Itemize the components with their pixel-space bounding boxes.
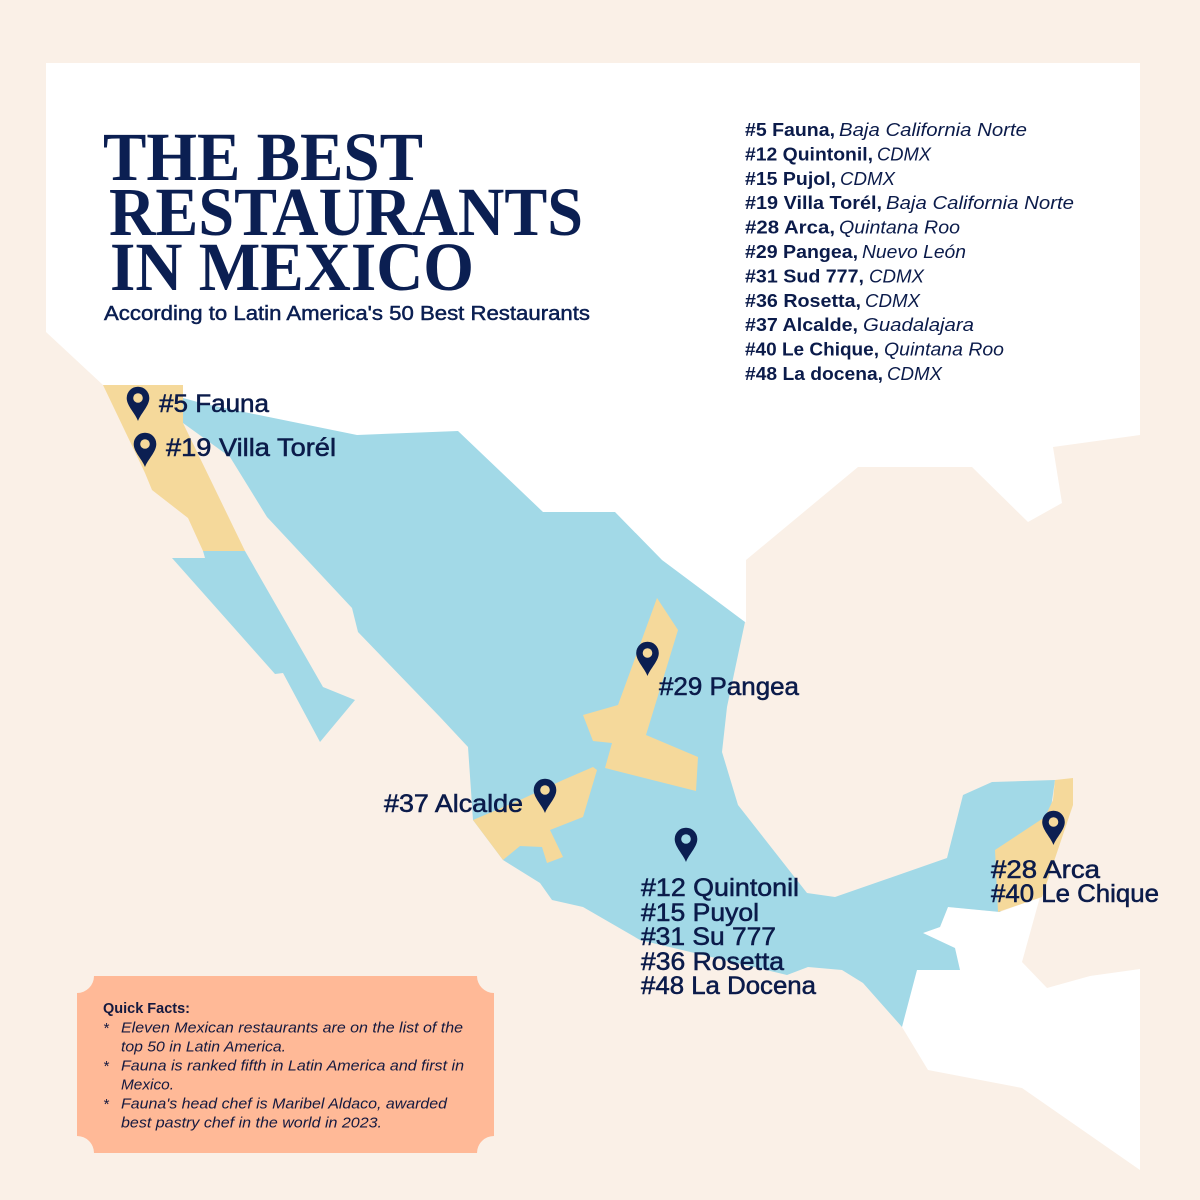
labels: Quintana Roo restaurants <box>991 856 1159 908</box>
labels: CDMX restaurants: #12 Quintonil <box>641 874 799 902</box>
pin: Villa Torel <box>134 433 156 467</box>
label: Fauna: #5 Fauna <box>159 390 269 418</box>
ranked restaurant list: CDMX <box>865 291 921 311</box>
panel: quick facts: Eleven Mexican restaurants are on the list of the <box>121 1020 463 1037</box>
title: THE BEST <box>103 119 423 195</box>
state: Quintana Roo <box>995 778 1073 912</box>
panel: quick facts: Fauna is ranked fifth in Latin America and first in <box>121 1058 464 1074</box>
pin: Pangea <box>636 642 659 676</box>
ranked restaurant list: #15 Pujol, <box>745 169 836 189</box>
labels: CDMX restaurants <box>641 874 816 1000</box>
ranked restaurant list: Quintana Roo <box>839 218 960 238</box>
ranked restaurant list: #36 Rosetta, <box>745 291 861 311</box>
panel: quick facts: top 50 in Latin America. <box>121 1039 286 1056</box>
title <box>103 119 583 305</box>
label: Pangea: #29 Pangea <box>659 673 799 701</box>
panel: quick facts: Fauna's head chef is Maribel Aldaco, awarded <box>121 1095 448 1112</box>
panel: quick facts: best pastry chef in the world in 2023. <box>121 1114 382 1131</box>
label: Villa Torel: #19 Villa Torél <box>166 434 336 462</box>
state: Nuevo Leon <box>583 598 698 791</box>
Baja California Sur <box>172 551 355 742</box>
water area: north <box>46 63 1140 622</box>
title: IN MEXICO <box>110 229 474 305</box>
ranked restaurant list: #28 Arca, <box>745 218 835 238</box>
ranked restaurant list: #29 Pangea, <box>745 242 858 262</box>
ranked restaurant list <box>745 120 1074 384</box>
pin: Alcalde <box>534 779 556 813</box>
ranked restaurant list: CDMX <box>887 364 943 384</box>
title: RESTAURANTS <box>109 174 583 250</box>
ranked restaurant list: #48 La docena, <box>745 364 883 384</box>
labels: CDMX restaurants: #36 Rosetta <box>641 948 784 976</box>
ranked restaurant list: Baja California Norte <box>839 120 1027 140</box>
subtitle: According to Latin America's 50 Best Restaurants <box>104 303 590 325</box>
panel: quick facts: * <box>103 1096 110 1113</box>
labels: CDMX restaurants: #15 Puyol <box>641 899 759 927</box>
water area: south <box>860 897 1140 1170</box>
ranked restaurant list: #12 Quintonil, <box>745 144 873 164</box>
state: Baja California Norte <box>103 385 245 551</box>
labels: Quintana Roo restaurants: #40 Le Chique <box>991 880 1159 908</box>
ranked restaurant list: #5 Fauna, <box>745 120 835 140</box>
pin: Fauna <box>127 387 149 421</box>
labels: CDMX restaurants: #31 Su 777 <box>641 923 776 951</box>
ranked restaurant list: Nuevo León <box>862 242 966 262</box>
ranked restaurant list: #31 Sud 777, <box>745 266 864 286</box>
ranked restaurant list: #40 Le Chique, <box>745 340 879 360</box>
ranked restaurant list: CDMX <box>877 144 932 164</box>
ranked restaurant list: #37 Alcalde, <box>745 315 858 335</box>
panel: quick facts: * <box>103 1020 110 1037</box>
ranked restaurant list: CDMX <box>840 169 896 189</box>
ranked restaurant list: Quintana Roo <box>884 340 1004 360</box>
ranked restaurant list: CDMX <box>869 266 925 286</box>
ranked restaurant list: Baja California Norte <box>886 193 1074 213</box>
ranked restaurant list: #19 Villa Torél, <box>745 193 882 213</box>
mainland Mexico <box>183 398 1055 1027</box>
labels: Quintana Roo restaurants: #28 Arca <box>991 856 1100 884</box>
panel: quick facts: * <box>103 1058 110 1075</box>
labels: CDMX restaurants: #48 La Docena <box>641 972 816 1000</box>
panel: quick facts <box>77 976 494 1153</box>
pin: Quintana Roo <box>1042 811 1065 845</box>
ranked restaurant list: Guadalajara <box>863 315 974 335</box>
panel: quick facts: Mexico. <box>121 1076 174 1094</box>
pin: CDMX <box>675 828 697 862</box>
label: Alcalde: #37 Alcalde <box>384 790 523 818</box>
state: Jalisco <box>473 767 597 863</box>
panel: quick facts: Quick Facts: <box>103 1001 190 1017</box>
